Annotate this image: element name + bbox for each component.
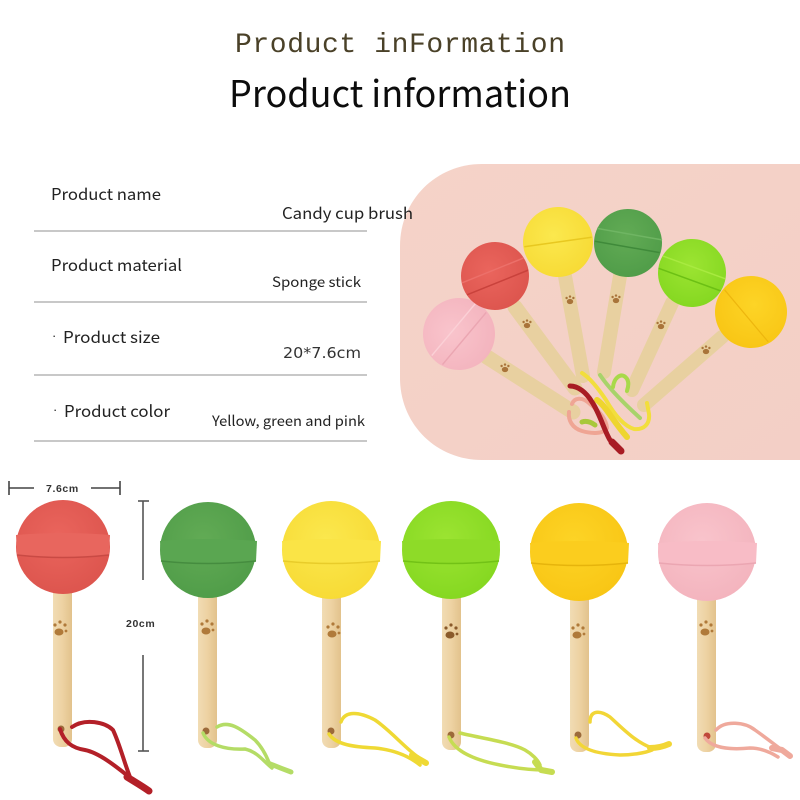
heading: handwritten title: Product inFormation bbox=[235, 30, 565, 61]
row: product color: Product color bbox=[64, 398, 171, 422]
sponge ball: red bbox=[451, 232, 539, 320]
tangled ropes bbox=[569, 373, 649, 451]
row: product material bbox=[34, 252, 367, 302]
row: product name: Product name bbox=[51, 181, 161, 205]
row: product name: Candy cup brush bbox=[282, 200, 413, 224]
row: product color: · bbox=[53, 402, 57, 417]
lollipop brush: golden yellow bbox=[530, 503, 669, 755]
row: product name bbox=[34, 181, 413, 231]
row: product size: 20*7.6cm bbox=[283, 344, 361, 362]
stick: pink bbox=[487, 357, 573, 412]
dimension: width 7.6cm: 7.6cm bbox=[46, 483, 79, 495]
panel: fan of six lollipop sponges on pink bbox=[400, 164, 800, 460]
row: product material: Sponge stick bbox=[272, 272, 361, 292]
sponge ball: yellow bbox=[518, 202, 598, 282]
dimension: width 7.6cm bbox=[9, 481, 120, 495]
stick: yellow bbox=[565, 276, 583, 376]
lollipop brush: green bbox=[160, 502, 291, 772]
heading: main title: Product information bbox=[229, 64, 571, 118]
lollipop brush: lime bbox=[402, 501, 552, 772]
sponge ball: green bbox=[589, 204, 667, 282]
sponge ball: orange bbox=[700, 261, 800, 363]
row: product size: Product size bbox=[63, 324, 160, 348]
lollipop brush: red bbox=[16, 500, 149, 791]
spec table bbox=[34, 181, 413, 441]
row: product material: Product material bbox=[51, 252, 182, 276]
lollipop brush: pink bbox=[658, 503, 790, 757]
panel background bbox=[400, 164, 800, 460]
stick: lime bbox=[632, 303, 672, 390]
stick: red bbox=[515, 307, 575, 388]
row: product color bbox=[34, 398, 367, 441]
dimension: height 20cm: 20cm bbox=[126, 618, 155, 630]
stick: orange bbox=[644, 337, 722, 405]
sponge ball: pink bbox=[408, 283, 510, 385]
sponge ball: lime bbox=[648, 229, 736, 317]
lollipop brush: yellow bbox=[282, 501, 426, 765]
stick: green bbox=[604, 276, 621, 372]
row: product size bbox=[34, 324, 367, 375]
row: product size: · bbox=[52, 328, 56, 343]
row: product color: Yellow, green and pink bbox=[211, 411, 365, 431]
